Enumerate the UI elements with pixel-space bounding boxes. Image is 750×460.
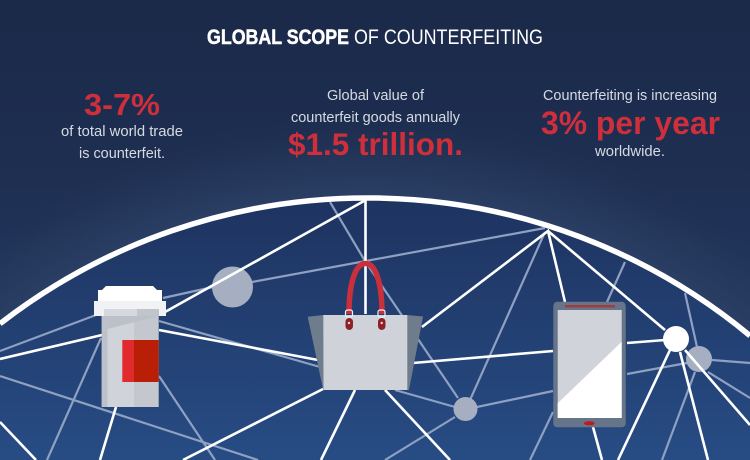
globe — [0, 198, 750, 460]
pill bottle label — [122, 340, 159, 382]
stat: annual increase: Counterfeiting is increasing — [543, 88, 717, 104]
title: OF COUNTERFEITING — [354, 26, 543, 49]
network: grey connecting lines — [0, 202, 750, 460]
pill bottle cap — [94, 286, 166, 316]
handbag left clasp — [346, 310, 353, 330]
network: grey nodes — [212, 266, 712, 421]
handbag handle — [349, 264, 382, 314]
stat: global value: counterfeit goods annually — [291, 110, 461, 126]
network: white node — [663, 326, 689, 352]
stat: share of world trade: of total world trade — [61, 124, 183, 140]
stat: global value — [288, 88, 463, 162]
handbag right clasp — [378, 310, 386, 330]
globe outline arc — [0, 198, 750, 336]
stat: annual increase — [541, 88, 720, 160]
stat: share of world trade: 3-7% — [84, 87, 160, 122]
stat: global value: Global value of — [327, 88, 425, 104]
title: GLOBAL SCOPE — [207, 26, 349, 49]
stat: global value: $1.5 trillion. — [288, 126, 463, 162]
network: white connecting lines — [0, 200, 750, 460]
stat: annual increase: worldwide. — [594, 144, 665, 160]
stat: share of world trade: is counterfeit. — [79, 146, 165, 162]
icon: pill bottle — [94, 286, 166, 407]
stat: share of world trade — [61, 87, 183, 162]
icon: handbag — [308, 264, 423, 390]
icon: smartphone — [553, 302, 626, 427]
stat: annual increase: 3% per year — [541, 105, 720, 141]
